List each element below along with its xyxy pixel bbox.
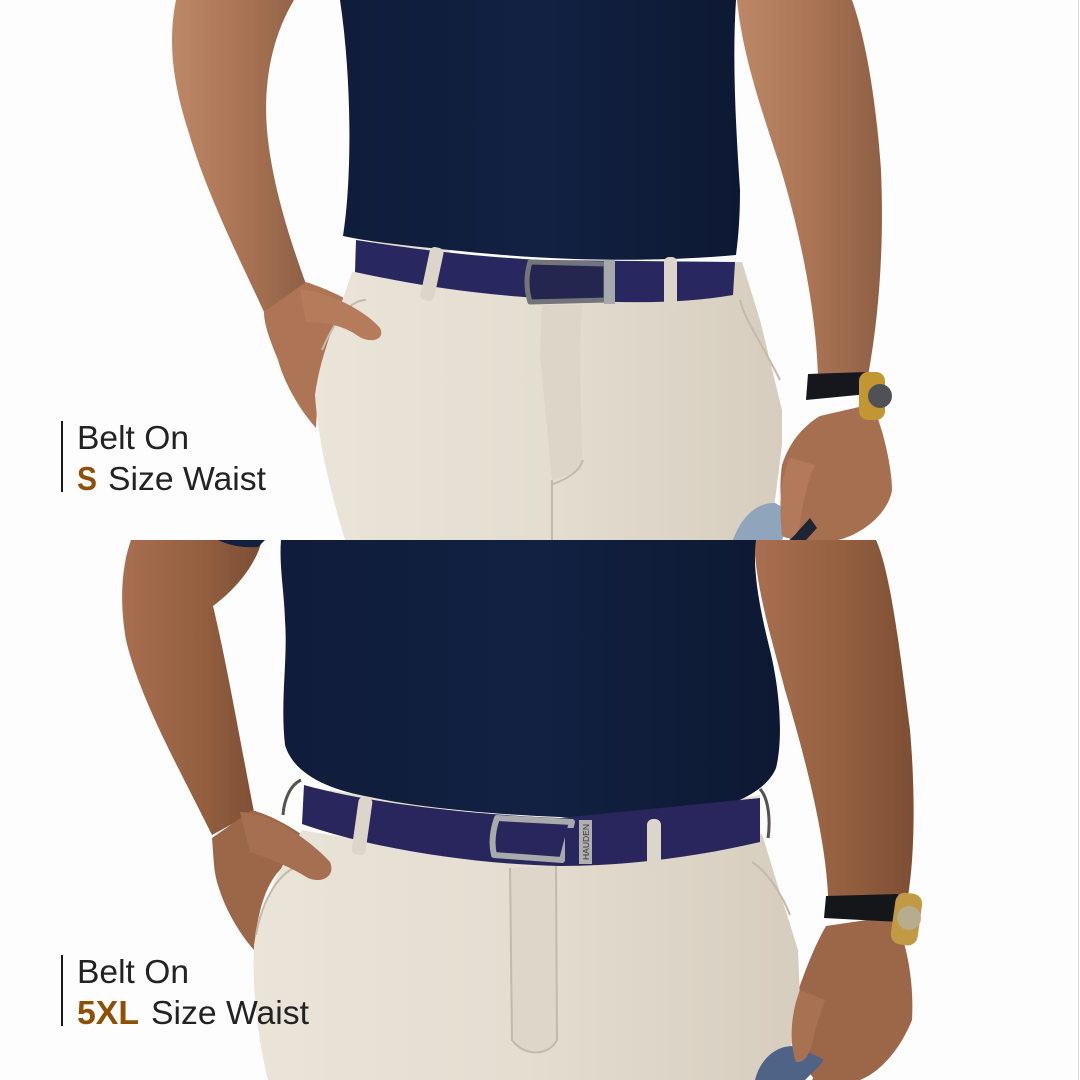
waistband sliver (372, 238, 450, 254)
left hand (212, 810, 331, 950)
buckle (493, 818, 572, 860)
fingers (780, 458, 815, 538)
right edge line (1078, 0, 1079, 1080)
trousers (254, 830, 800, 1080)
label: 5XL size: Belt On (77, 953, 189, 990)
label: S size: Belt On (77, 419, 189, 456)
buckle (527, 262, 606, 302)
right arm (737, 0, 882, 376)
navy shirt (281, 540, 780, 818)
sleeve edge (218, 540, 265, 547)
watch (824, 891, 923, 947)
label: 5XL size: 5XL (77, 994, 139, 1031)
label: 5XL size (61, 953, 309, 1031)
label: S size (61, 419, 266, 497)
label: S size: S (77, 460, 97, 497)
belt (302, 785, 760, 872)
label: S size: Size Waist (108, 460, 266, 497)
left hand thumb (300, 290, 381, 340)
left thumb (240, 812, 331, 880)
label: 5XL size: Size Waist (151, 994, 309, 1031)
left arm (122, 540, 262, 835)
brand tag: HAUDEN (582, 824, 591, 860)
right hand (793, 916, 912, 1080)
left hand (264, 282, 381, 428)
panel: S size waist (61, 0, 892, 540)
right hand (780, 404, 892, 540)
fly details (510, 866, 557, 1052)
glasses case (755, 1046, 825, 1080)
right arm (754, 540, 914, 896)
navy shirt (340, 0, 740, 260)
left arm (172, 0, 306, 312)
panel: 5XL size waist (0, 540, 1080, 1080)
watch (806, 372, 892, 420)
waistband slivers (330, 790, 760, 822)
belt (355, 240, 735, 311)
trouser details (540, 305, 582, 480)
fingers (792, 990, 825, 1062)
white panel backing (0, 540, 1080, 1080)
belt strap loops at sides (283, 780, 769, 838)
trousers (315, 262, 782, 540)
glasses case (733, 503, 787, 540)
